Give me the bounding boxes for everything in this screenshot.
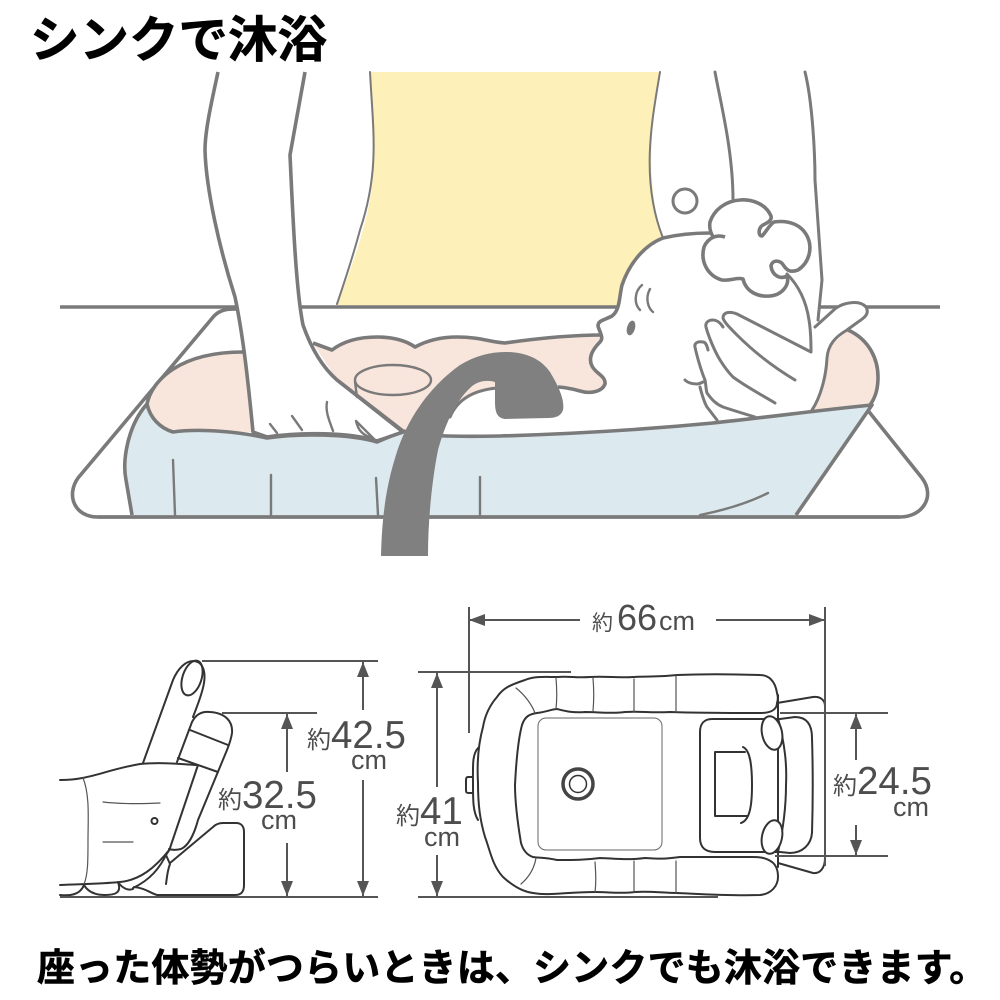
caption: 座った体勢がつらいときは、シンクでも沐浴できます。: [37, 948, 987, 990]
tub crease lines: [173, 460, 768, 515]
label: height 32.5 cm: 約32.5: [218, 774, 317, 817]
label: depth 41 cm: cm: [424, 822, 460, 852]
right pink tub interior: [805, 330, 878, 412]
faucet: [381, 352, 563, 556]
dimension lines: [60, 607, 888, 897]
sink blue tub body: [125, 404, 872, 515]
caregiver left arm: [205, 72, 403, 441]
grips: [759, 714, 785, 752]
top view of tub: [466, 674, 825, 895]
seat: [700, 717, 813, 853]
label: width 24.5 cm: cm: [893, 792, 929, 822]
base scallops: [60, 882, 133, 895]
outer tub outline: [478, 674, 778, 895]
head back line: [787, 274, 811, 351]
side view of tub: [60, 658, 244, 895]
headrest: [169, 712, 232, 850]
drain: [563, 769, 593, 799]
torso outline: [337, 72, 663, 304]
inner basin: [538, 718, 662, 850]
baby face: [625, 285, 653, 336]
caregiver right arm: [715, 72, 822, 320]
label: height 42.5 cm: 約42.5: [307, 714, 406, 757]
label: depth 41 cm: 約41: [396, 790, 463, 833]
sink bottom edge: [98, 515, 900, 519]
centre pink tub interior: [313, 335, 615, 432]
torso: [337, 72, 680, 306]
label: depth 41 cm: [396, 790, 463, 852]
title: シンクで沐浴: [30, 13, 327, 68]
foam: [703, 200, 810, 296]
label: width 66 cm: 約66cm: [592, 597, 695, 638]
seat inner window: [715, 747, 752, 823]
sink: [72, 309, 928, 517]
hand creases: [270, 402, 374, 439]
head outline: [558, 233, 710, 392]
baby body and head: [403, 233, 867, 440]
rib lines: [516, 676, 676, 893]
soap bubble: [673, 189, 697, 213]
counter line: [60, 305, 940, 309]
label: width 24.5 cm: 約24.5: [833, 760, 932, 803]
wedge: [133, 823, 244, 895]
label: height 32.5 cm: cm: [261, 805, 297, 835]
seat body: [60, 763, 197, 885]
drain knob and rim: [466, 748, 478, 820]
back panel: [777, 695, 825, 873]
left pink tub interior: [147, 352, 253, 432]
arrowheads: [281, 614, 862, 896]
label: width 24.5 cm: [833, 760, 932, 822]
label: height 42.5 cm: cm: [351, 745, 387, 775]
baby support hand: [685, 303, 867, 420]
illustration: bathing a baby in the sink: [60, 72, 940, 556]
backrest: [143, 661, 205, 763]
cup: [337, 365, 432, 431]
